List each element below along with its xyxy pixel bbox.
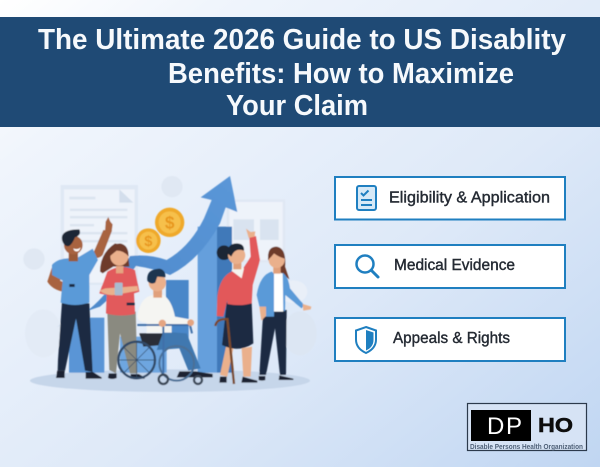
logo: DPHO: DP (487, 413, 522, 440)
icon: gold coins: $ (144, 234, 152, 250)
person: man pointing up (47, 217, 113, 379)
rising arrow (56, 176, 237, 327)
logo: DPHO: HO (538, 415, 573, 437)
icon: checklist (357, 186, 376, 210)
faded background documents and badges (23, 176, 317, 357)
title: Benefits: How to Maximize (168, 58, 514, 90)
logo: DPHO (468, 404, 586, 451)
illustration: people with rising benefits chart (23, 176, 317, 392)
logo: DPHO: Disable Persons Health Organization (470, 442, 583, 451)
icon: magnifying glass (356, 256, 378, 277)
title: Your Claim (226, 90, 368, 122)
person: woman with phone (99, 243, 145, 379)
title banner (0, 17, 600, 127)
title (38, 24, 566, 122)
icon: gold coins: $ (165, 213, 175, 233)
panel: eligibility and application (335, 177, 565, 220)
title: The Ultimate 2026 Guide to US Disablity (38, 24, 566, 56)
person: woman in blue jacket (257, 247, 311, 381)
icon: gold coins (136, 208, 184, 253)
icon: shield (356, 327, 376, 353)
person: man in wheelchair (118, 269, 213, 384)
ground shadow (30, 369, 310, 392)
bar chart (69, 227, 232, 373)
person: woman with cane (215, 229, 260, 384)
label: Eligibility & Application (389, 190, 550, 206)
wheelchair (118, 325, 202, 384)
label: Appeals & Rights (393, 330, 510, 347)
panel: medical evidence (335, 245, 565, 288)
label: Medical Evidence (394, 257, 515, 274)
panel: appeals and rights (335, 318, 565, 361)
